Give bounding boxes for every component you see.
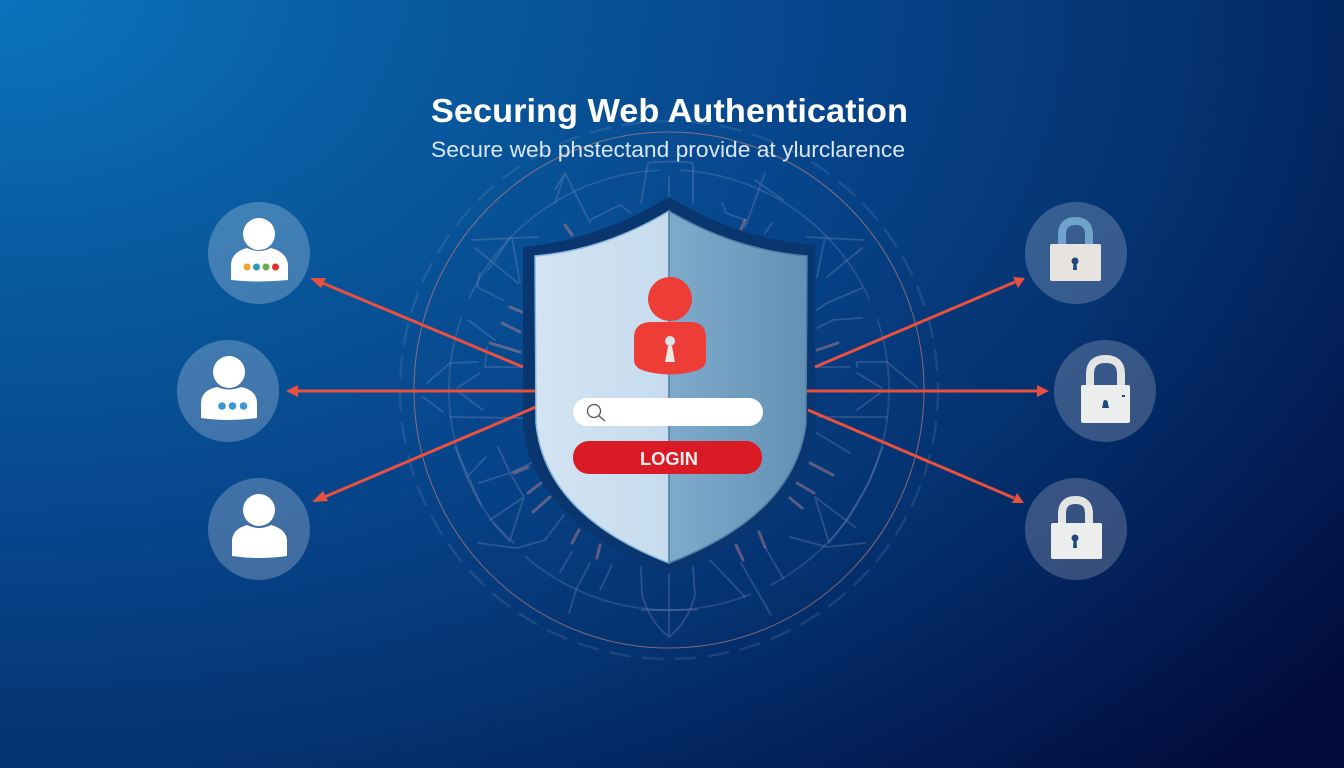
shield (535, 211, 807, 563)
icon: magnifier (588, 404, 605, 421)
arrow to top user (310, 278, 523, 367)
shield left half (535, 211, 669, 563)
user badge: middle with blue dots (177, 340, 279, 442)
inner web lines (423, 162, 917, 637)
search field (573, 398, 763, 426)
user badge: top with colored dots (208, 202, 310, 304)
arrow to bottom lock (808, 410, 1024, 503)
orange radial ticks (490, 220, 838, 560)
subtitle: Secure web phstectand provide at ylurclarence (431, 137, 905, 162)
shield right half (669, 211, 807, 563)
arrow to top lock (815, 277, 1025, 367)
lock badge: bottom (1025, 478, 1127, 580)
login button: LOGIN (640, 448, 698, 469)
arrow to middle user (286, 385, 536, 397)
shield frame (523, 197, 815, 574)
login button (573, 441, 762, 474)
arrow to bottom user (312, 407, 536, 502)
outer thin ring (414, 132, 924, 648)
title: Securing Web Authentication (431, 92, 908, 129)
red user icon (634, 277, 706, 374)
dashed ring (400, 121, 938, 659)
arrow to middle lock (806, 385, 1049, 397)
lock badge: top with blue shackle (1025, 202, 1127, 304)
network globe pattern (400, 121, 938, 659)
lock badge: middle (1054, 340, 1156, 442)
arrows (286, 277, 1049, 503)
user badge: bottom plain (208, 478, 310, 580)
